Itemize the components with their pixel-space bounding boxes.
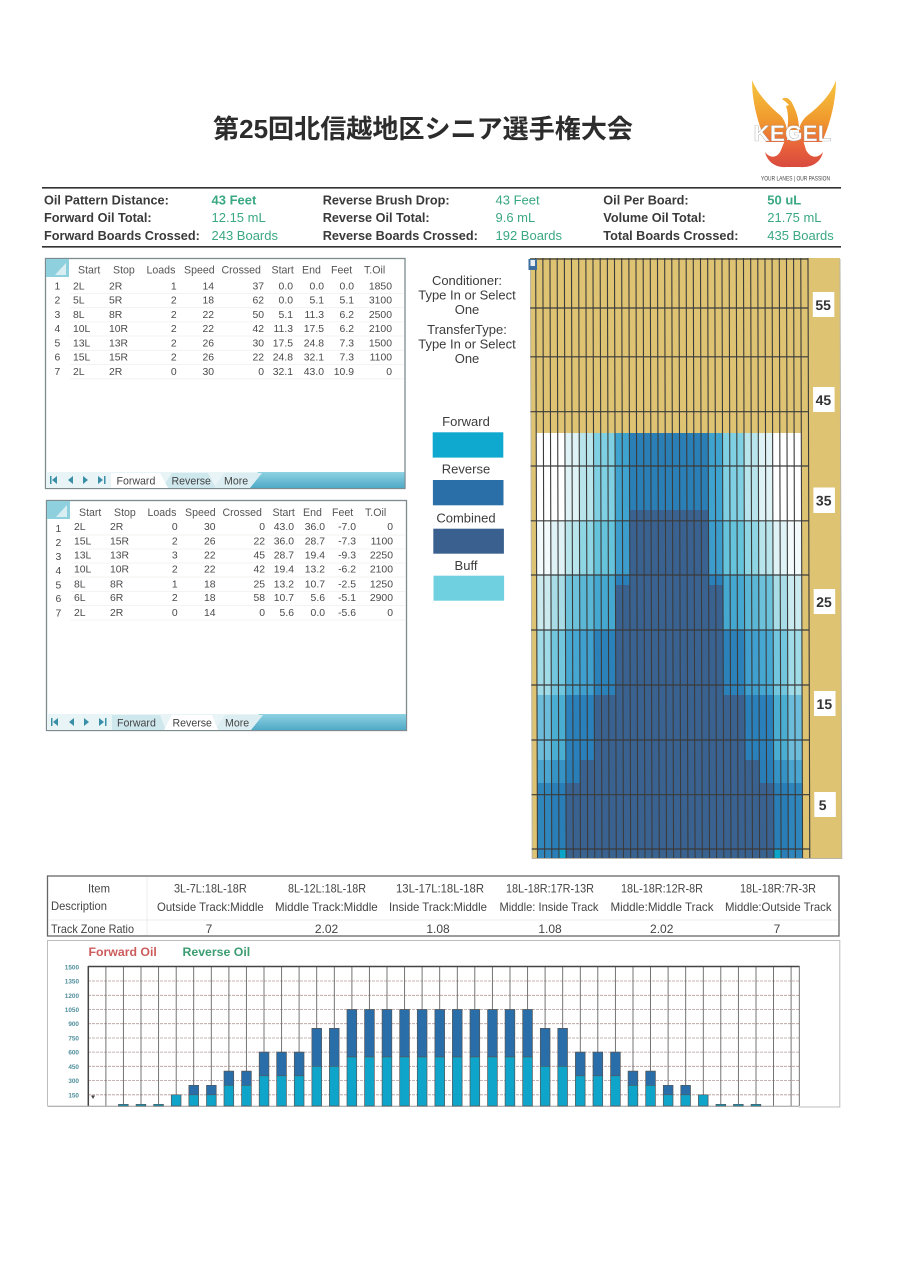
forward rows: 62 — [252, 296, 264, 307]
forward rows: 2R — [109, 367, 123, 378]
item row: 8L-12L:18L-18R — [288, 882, 366, 896]
summary column 1 — [44, 192, 278, 243]
summary column 3: Volume Oil Total: — [603, 211, 706, 225]
reverse table header — [79, 507, 386, 519]
summary column 3: 435 Boards — [767, 228, 834, 243]
forward rows: 15L — [73, 352, 91, 364]
description row: Description — [51, 899, 107, 913]
reverse rows: 13.2 — [305, 564, 325, 576]
forward rows: 11.3 — [274, 324, 293, 335]
forward rows: 0 — [386, 367, 392, 378]
forward rows: 11.3 — [305, 310, 324, 321]
summary column 1: Oil Pattern Distance: — [44, 194, 169, 208]
forward rows: 0.0 — [340, 282, 354, 292]
description row: Outside Track:Middle — [157, 900, 264, 914]
y axis labels: 150 — [68, 1092, 79, 1099]
distance marker 15 — [814, 691, 836, 716]
forward rows: 2500 — [369, 310, 392, 321]
forward rows: 2 — [171, 296, 177, 307]
conditioner and transfer text: TransferType: — [427, 322, 507, 337]
track zone ratio table — [48, 876, 839, 936]
forward rows: 2 — [171, 352, 177, 364]
reverse rows: 2 — [172, 564, 178, 576]
forward rows: 2 — [171, 338, 177, 349]
forward rows: 2 — [171, 324, 177, 335]
y axis labels: 600 — [68, 1050, 79, 1057]
forward rows: 14 — [202, 282, 214, 292]
reverse rows: 2100 — [370, 564, 393, 576]
y axis labels: 300 — [68, 1078, 79, 1085]
reverse table header: Start — [79, 507, 101, 519]
description row: Middle:Middle Track — [610, 900, 714, 914]
forward rows: 10.9 — [334, 367, 354, 378]
reverse rows: 45 — [253, 550, 265, 562]
item row: 18L-18R:7R-3R — [740, 882, 816, 896]
forward rows: 22 — [252, 352, 264, 364]
forward rows: 2R — [109, 282, 123, 292]
forward rows: 6.2 — [340, 310, 354, 321]
forward rows: 50 — [252, 310, 264, 321]
summary column 2: Reverse Oil Total: — [323, 211, 430, 225]
reverse rows: 4 — [56, 566, 62, 577]
reverse rows: 19.4 — [305, 550, 325, 562]
reverse rows: 5 — [56, 580, 62, 592]
reverse rows: 36.0 — [274, 536, 294, 548]
reverse rows: 10R — [110, 564, 130, 576]
ratio row: 2.02 — [650, 922, 674, 936]
reverse table tab bar: Forward — [117, 718, 156, 730]
conditioner and transfer text: Conditioner: — [432, 273, 502, 288]
legend: oil colours — [433, 414, 504, 601]
forward rows: 2L — [73, 282, 85, 292]
y axis labels: 1200 — [65, 993, 79, 1000]
reverse rows: 18 — [204, 580, 216, 590]
forward rows: 17.5 — [304, 324, 324, 335]
forward table tab bar: More — [224, 476, 248, 488]
item row: Item — [88, 882, 110, 896]
ratio row: Track Zone Ratio — [51, 922, 134, 936]
forward rows: 1850 — [369, 282, 392, 292]
reverse rows: 2 — [172, 593, 178, 604]
y axis labels: 1500 — [65, 964, 79, 972]
forward rows — [54, 282, 392, 378]
forward oil bars — [118, 1057, 761, 1106]
reverse rows: 2R — [110, 608, 124, 619]
reverse rows: 1100 — [371, 536, 393, 548]
reverse table header: Feet — [332, 507, 353, 519]
forward table header: Stop — [113, 264, 135, 276]
item row — [88, 882, 816, 896]
forward rows: 5.1 — [279, 310, 293, 321]
reverse rows: 58 — [253, 593, 265, 604]
reverse rows: 10.7 — [305, 580, 325, 590]
forward rows: 6.2 — [340, 324, 354, 335]
forward rows: 2L — [73, 367, 85, 378]
forward rows: 17.5 — [273, 338, 293, 349]
chart legend: Reverse Oil — [182, 945, 250, 959]
ratio row: 1.08 — [426, 922, 450, 936]
forward rows: 10R — [109, 324, 129, 335]
summary column 3: 50 uL — [767, 192, 801, 208]
reverse table tab bar — [47, 714, 406, 730]
summary column 2: Reverse Boards Crossed: — [323, 229, 478, 243]
reverse rows: 6L — [74, 593, 86, 604]
forward rows: 7.3 — [340, 338, 354, 349]
distance marker 35 — [813, 488, 835, 513]
reverse rows: 1250 — [370, 580, 393, 590]
reverse rows: 0 — [172, 608, 178, 619]
forward rows: 1100 — [370, 352, 392, 364]
distance marker 5: 5 — [819, 797, 827, 813]
distance marker 25 — [814, 589, 835, 614]
title: 第25回北信越地区シニア選手権大会 — [213, 114, 633, 144]
reverse rows: 2 — [56, 538, 62, 549]
panel: forward table — [46, 258, 405, 488]
forward rows: 5 — [54, 338, 60, 349]
forward rows: 1500 — [369, 338, 392, 349]
conditioner and transfer text: Type In or Select — [418, 336, 516, 352]
forward rows: 8L — [73, 310, 85, 321]
reverse rows: 7 — [56, 608, 62, 620]
forward rows: 32.1 — [273, 367, 293, 378]
reverse rows: 3 — [172, 550, 178, 562]
description row: Inside Track:Middle — [389, 900, 487, 914]
legend: oil colours: Combined — [436, 510, 496, 526]
reverse table tab bar: Reverse — [172, 718, 212, 730]
forward rows: 0.0 — [310, 282, 324, 292]
forward rows: 24.8 — [304, 338, 324, 349]
reverse rows: 5.6 — [280, 608, 294, 619]
conditioner and transfer text: One — [455, 302, 479, 317]
reverse rows: -9.3 — [338, 550, 356, 562]
reverse rows: 13L — [74, 550, 92, 562]
forward rows: 15R — [109, 352, 129, 364]
forward rows: 30 — [202, 367, 214, 378]
y axis labels: 1350 — [65, 978, 79, 986]
forward rows: 0 — [258, 367, 264, 378]
ratio row: 2.02 — [315, 922, 339, 936]
summary column 1: Forward Oil Total: — [44, 211, 152, 225]
panel: reverse table — [46, 500, 406, 730]
distance marker 25: 25 — [816, 594, 832, 610]
reverse rows: 13.2 — [274, 580, 294, 590]
forward rows: 0.0 — [279, 296, 293, 307]
reverse table header: Start — [272, 507, 295, 519]
y axis labels: 450 — [68, 1064, 79, 1071]
summary column 1: Forward Boards Crossed: — [44, 229, 200, 243]
forward rows: 10L — [73, 324, 91, 335]
reverse rows: -7.0 — [338, 522, 356, 533]
reverse rows: 2L — [74, 522, 86, 533]
summary column 1: 12.15 mL — [212, 210, 266, 225]
reverse rows: 8R — [110, 580, 124, 590]
reverse rows: 18 — [204, 593, 216, 604]
summary column 3: 21.75 mL — [767, 210, 822, 225]
conditioner and transfer text — [418, 273, 516, 366]
reverse oil bars — [189, 1010, 690, 1095]
forward rows: 2 — [171, 310, 177, 321]
reverse rows: 0 — [172, 522, 178, 533]
reverse rows: 14 — [204, 608, 216, 619]
y axis labels — [65, 964, 79, 1099]
forward rows: 2100 — [369, 324, 392, 335]
ratio row — [51, 922, 781, 936]
summary column 3 — [603, 192, 834, 243]
distance marker 55 — [813, 292, 834, 317]
forward rows: 3 — [54, 310, 60, 321]
forward table header: Start — [78, 264, 100, 276]
forward table tab bar: Forward — [116, 476, 155, 488]
description row: Middle Track:Middle — [275, 900, 378, 914]
forward table header: End — [302, 264, 321, 276]
reverse rows: 13R — [110, 550, 130, 562]
legend: oil colours: Reverse — [442, 462, 490, 476]
logo: Kegel phoenix: YOUR LANES | OUR PASSION — [761, 176, 830, 182]
conditioner and transfer text: One — [455, 351, 479, 366]
forward rows: 5L — [73, 296, 85, 307]
reverse rows: -6.2 — [338, 564, 356, 576]
logo: Kegel phoenix: KEGEL — [754, 121, 832, 146]
forward rows: 18 — [202, 296, 214, 307]
forward rows: 7.3 — [340, 352, 354, 364]
forward rows: 32.1 — [304, 352, 324, 364]
forward table header: Start — [272, 264, 294, 276]
reverse rows: 42 — [253, 564, 265, 576]
forward rows: 2 — [54, 296, 60, 307]
forward table header: T.Oil — [364, 264, 385, 276]
summary column 1: 43 Feet — [212, 192, 257, 208]
reverse table header: Loads — [148, 507, 176, 519]
summary column 2: Reverse Brush Drop: — [323, 194, 450, 208]
reverse rows: 2L — [74, 608, 86, 619]
reverse table header: Crossed — [222, 507, 262, 519]
reverse rows: 22 — [204, 564, 216, 576]
forward rows: 5.1 — [340, 296, 354, 307]
oil per board bar chart — [48, 940, 840, 1107]
forward table tab bar — [46, 472, 404, 488]
description row: Middle: Inside Track — [500, 900, 599, 914]
reverse table header: Stop — [114, 507, 136, 519]
forward rows: 0.0 — [279, 282, 293, 292]
forward rows: 22 — [202, 324, 214, 335]
reverse rows: 5.6 — [311, 593, 325, 604]
chart legend: Forward Oil — [88, 945, 157, 959]
forward rows: 5R — [109, 296, 123, 307]
forward rows: 1 — [171, 282, 177, 292]
reverse rows: 1 — [172, 580, 178, 590]
distance marker 15: 15 — [816, 696, 832, 712]
summary column 1: 243 Boards — [212, 228, 278, 243]
description row: Middle:Outside Track — [725, 900, 832, 914]
reverse rows: 1 — [56, 524, 62, 535]
reverse table header: End — [303, 507, 322, 519]
y axis labels: 900 — [68, 1021, 79, 1028]
summary column 2 — [323, 192, 562, 243]
reverse rows: 28.7 — [305, 536, 325, 548]
forward rows: 30 — [252, 338, 264, 349]
description row — [51, 899, 832, 914]
forward table header: Speed — [184, 264, 215, 276]
reverse rows: 22 — [253, 536, 265, 548]
pattern summary panel — [42, 188, 841, 247]
reverse rows: -5.6 — [338, 608, 356, 619]
reverse rows: 0 — [387, 522, 393, 533]
summary column 3: Total Boards Crossed: — [603, 229, 738, 243]
forward rows: 26 — [202, 338, 214, 349]
reverse rows: 2250 — [370, 550, 393, 562]
forward rows: 13R — [109, 338, 129, 349]
distance marker 45 — [813, 387, 835, 412]
logo: Kegel phoenix — [752, 80, 836, 182]
y axis labels: 750 — [68, 1036, 79, 1042]
forward table header: Feet — [331, 264, 352, 276]
ratio row: 7 — [774, 922, 781, 936]
reverse rows: 0 — [387, 608, 393, 619]
reverse rows: 25 — [253, 580, 265, 590]
lane oil pattern graphic — [528, 258, 842, 859]
reverse rows: 8L — [74, 580, 86, 590]
conditioner and transfer text: Type In or Select — [418, 288, 516, 302]
forward rows: 13L — [73, 338, 91, 349]
summary column 2: 43 Feet — [496, 192, 540, 208]
distance marker 45: 45 — [816, 392, 831, 408]
reverse rows: 43.0 — [274, 522, 294, 533]
reverse rows: 15L — [74, 536, 92, 548]
item row: 3L-7L:18L-18R — [174, 882, 247, 896]
reverse rows: 2900 — [370, 593, 393, 604]
reverse rows: 15R — [110, 536, 130, 548]
reverse rows: 0 — [259, 522, 265, 533]
forward rows: 5.1 — [310, 296, 324, 307]
reverse rows: 19.4 — [274, 564, 294, 576]
y axis labels: 1050 — [65, 1007, 79, 1014]
reverse rows: 0 — [259, 608, 265, 619]
forward rows: 8R — [109, 310, 123, 321]
item row: 18L-18R:12R-8R — [621, 882, 703, 896]
reverse rows: 36.0 — [305, 522, 325, 533]
forward rows: 26 — [202, 352, 214, 364]
forward rows: 24.8 — [273, 352, 293, 364]
reverse rows: 10.7 — [274, 593, 294, 604]
reverse table tab bar: More — [225, 718, 249, 730]
forward rows: 43.0 — [304, 367, 324, 378]
reverse rows: 0.0 — [311, 608, 325, 619]
summary column 3: Oil Per Board: — [603, 194, 689, 208]
forward rows: 4 — [54, 324, 60, 335]
summary column 2: 9.6 mL — [496, 210, 535, 225]
ratio row: 7 — [206, 922, 213, 936]
distance marker 35: 35 — [816, 493, 832, 508]
forward rows: 37 — [252, 282, 264, 292]
forward table header — [78, 264, 385, 276]
oil bands — [536, 433, 803, 858]
forward rows: 6 — [54, 352, 60, 364]
distance marker 5 — [814, 792, 836, 817]
reverse rows: -5.1 — [338, 593, 356, 604]
forward rows: 22 — [202, 310, 214, 321]
forward rows: 3100 — [369, 296, 392, 307]
reverse rows: 26 — [204, 536, 216, 548]
summary column 2: 192 Boards — [496, 228, 562, 243]
forward rows: 42 — [252, 324, 264, 335]
reverse rows: 3 — [56, 552, 62, 563]
reverse rows — [56, 522, 393, 620]
reverse rows: 6 — [56, 594, 62, 605]
item row: 13L-17L:18L-18R — [396, 882, 484, 896]
reverse table header: T.Oil — [365, 507, 386, 519]
legend: oil colours: Forward — [442, 414, 490, 429]
forward rows: 0 — [171, 367, 177, 378]
forward rows: 7 — [54, 367, 60, 378]
reverse rows: 6R — [110, 593, 124, 604]
reverse rows: -2.5 — [338, 580, 356, 590]
distance marker 55: 55 — [815, 297, 831, 313]
lane corner marker — [528, 259, 537, 270]
reverse rows: 2R — [110, 522, 124, 533]
legend: oil colours: Buff — [455, 558, 478, 573]
forward table header: Loads — [146, 264, 175, 276]
ratio row: 1.08 — [538, 922, 562, 936]
item row: 18L-18R:17R-13R — [506, 882, 594, 896]
chart legend — [88, 945, 250, 959]
reverse rows: 30 — [204, 522, 216, 533]
forward table header: Crossed — [222, 264, 261, 276]
forward rows: 1 — [54, 282, 60, 292]
reverse rows: -7.3 — [338, 536, 356, 548]
forward table tab bar: Reverse — [172, 476, 211, 488]
reverse rows: 10L — [74, 564, 92, 576]
reverse table header: Speed — [185, 507, 216, 519]
reverse rows: 22 — [204, 550, 216, 562]
reverse rows: 28.7 — [274, 550, 294, 562]
reverse rows: 2 — [172, 536, 178, 548]
